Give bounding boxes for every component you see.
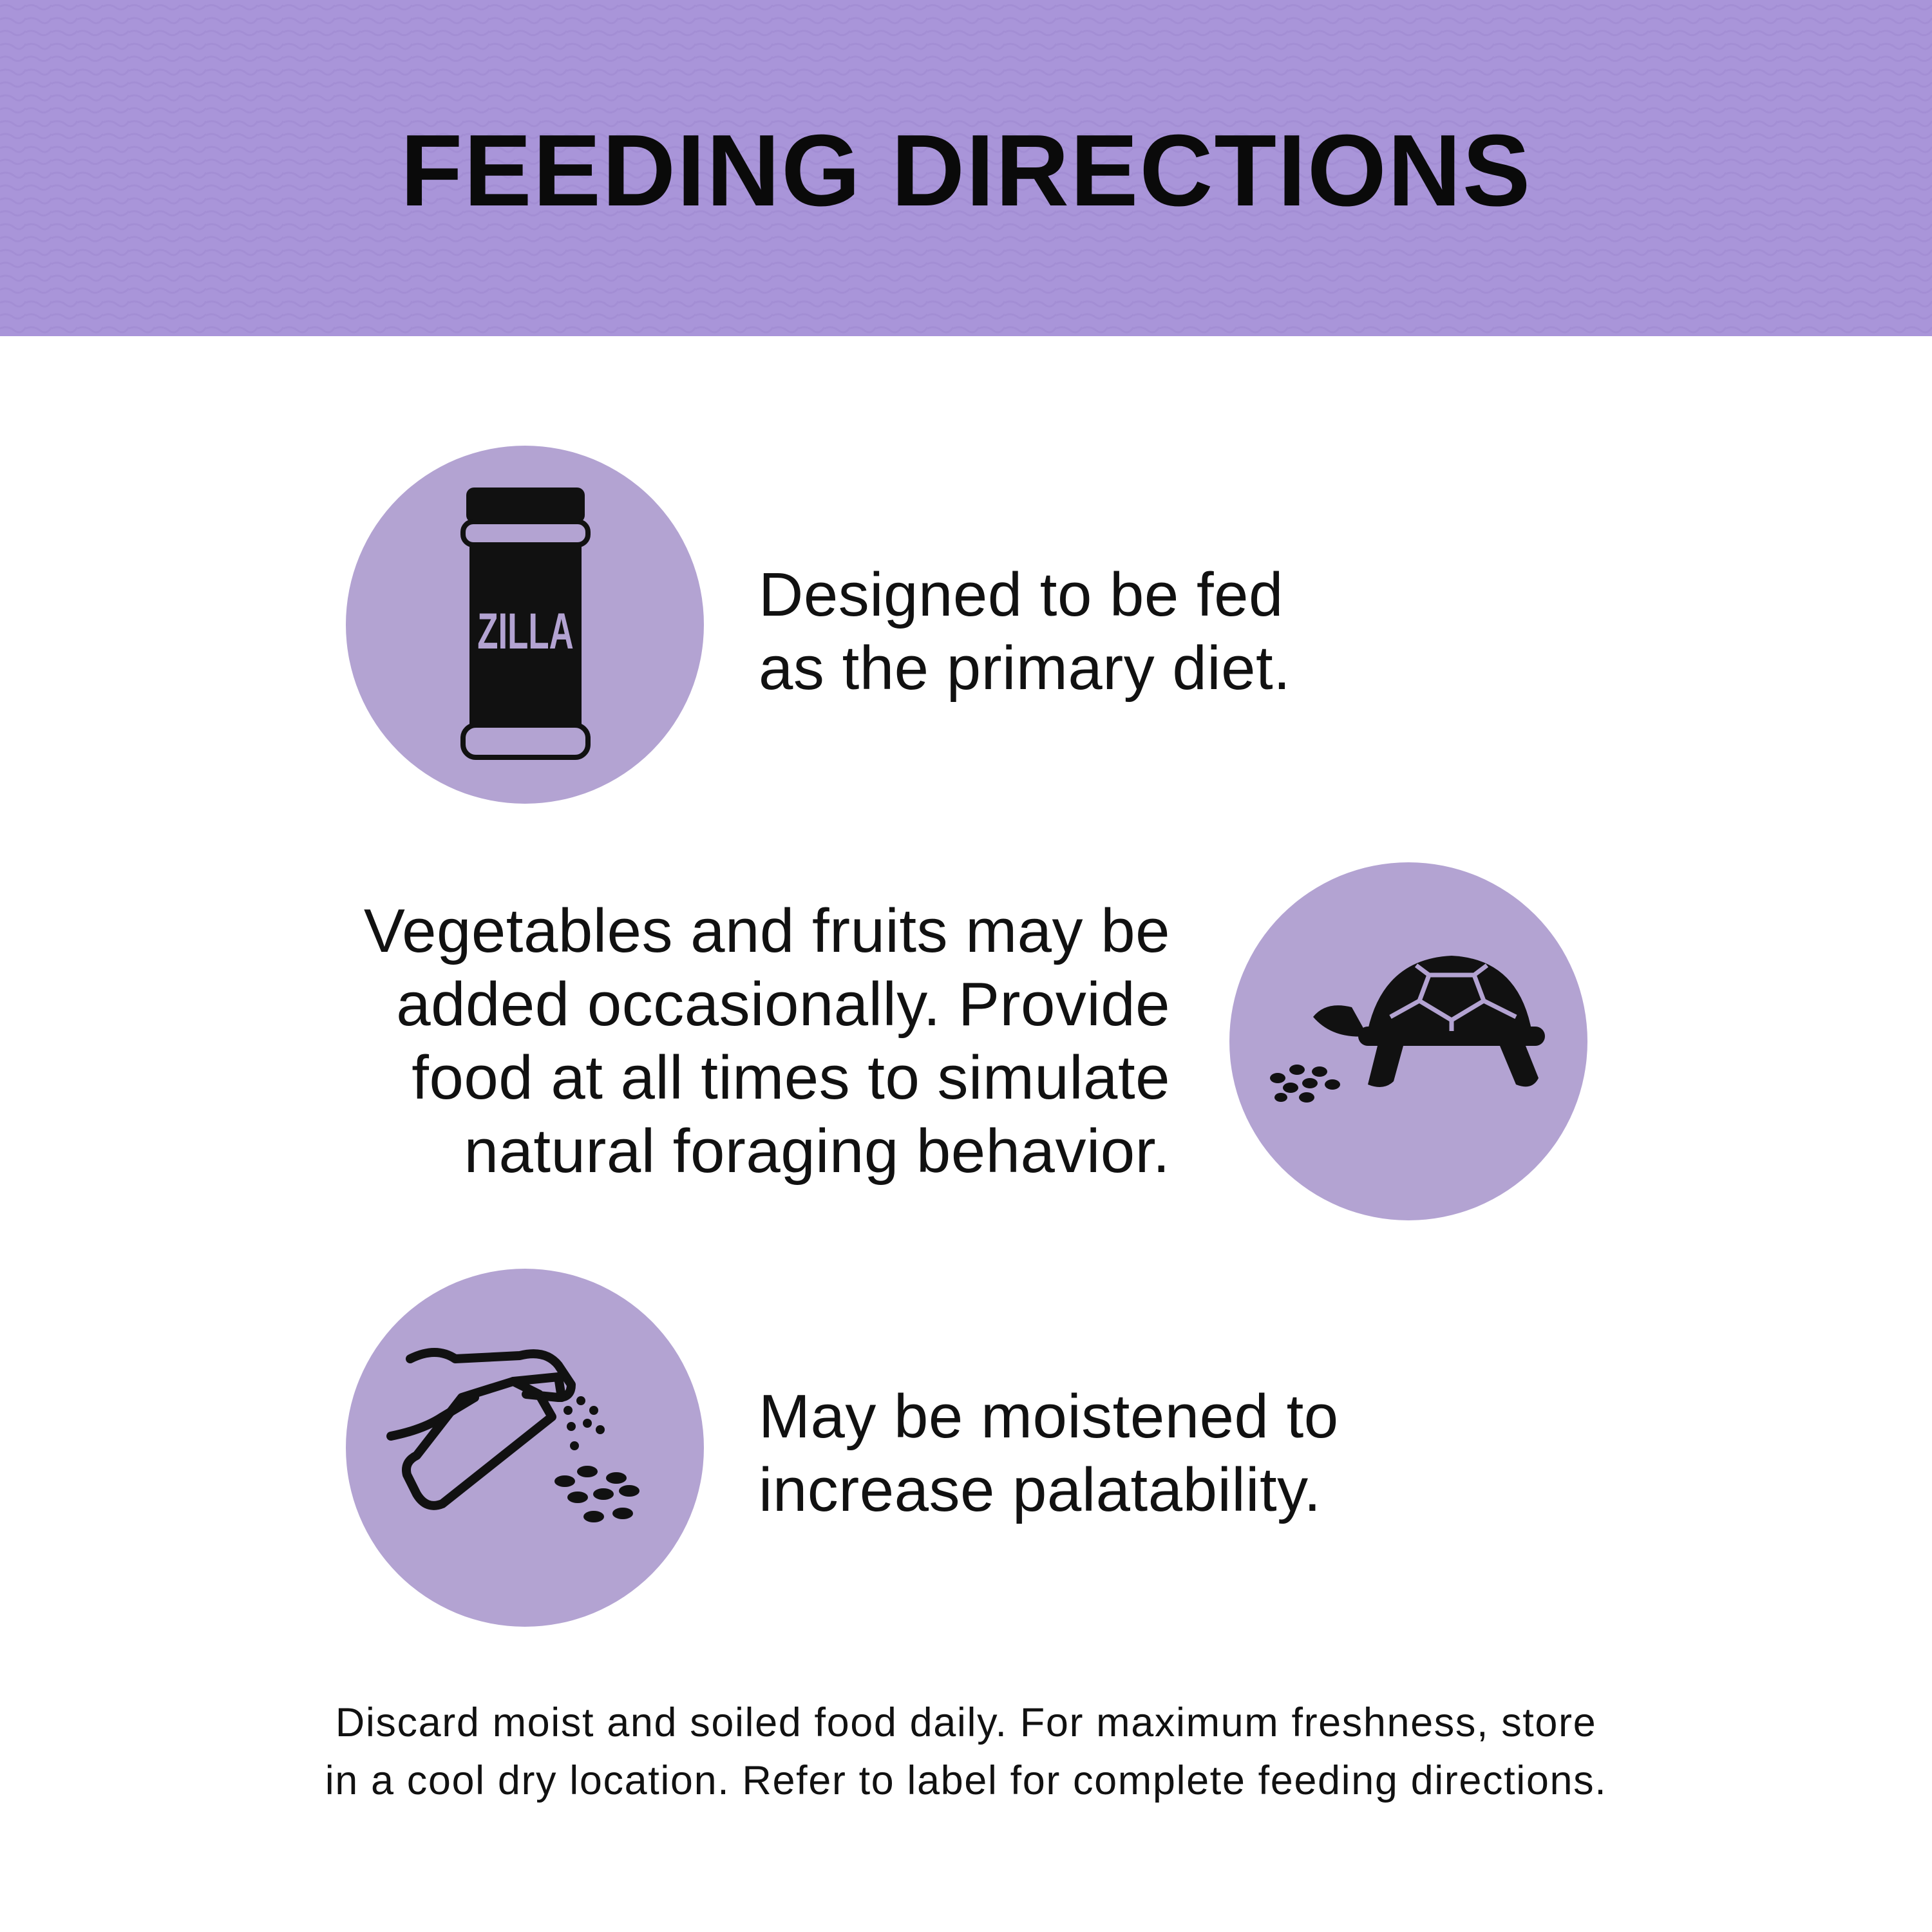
- footer note: [325, 1700, 1607, 1803]
- icon: spray bottle: [346, 1269, 704, 1627]
- text 2: food at all times to simulate: [412, 1043, 1170, 1112]
- title: FEEDING DIRECTIONS: [401, 114, 1531, 227]
- text 1: [759, 560, 1291, 703]
- text 2: added occasionally. Provide: [396, 970, 1170, 1039]
- text 3: increase palatability.: [759, 1455, 1321, 1524]
- text 1: Designed to be fed: [759, 560, 1283, 629]
- header band: [0, 0, 1932, 336]
- text 2: [364, 896, 1170, 1186]
- text 1: as the primary diet.: [759, 634, 1291, 703]
- footer note: Discard moist and soiled food daily. For maximum freshness, store: [336, 1700, 1596, 1745]
- icon: food jar: [346, 446, 704, 804]
- icon: food jar: ZILLA: [477, 603, 574, 660]
- icon: tortoise: [1229, 862, 1587, 1220]
- text 3: [759, 1382, 1339, 1524]
- footer note: in a cool dry location. Refer to label for complete feeding directions.: [325, 1758, 1607, 1803]
- text 2: Vegetables and fruits may be: [364, 896, 1170, 965]
- text 2: natural foraging behavior.: [464, 1117, 1170, 1186]
- text 3: May be moistened to: [759, 1382, 1339, 1451]
